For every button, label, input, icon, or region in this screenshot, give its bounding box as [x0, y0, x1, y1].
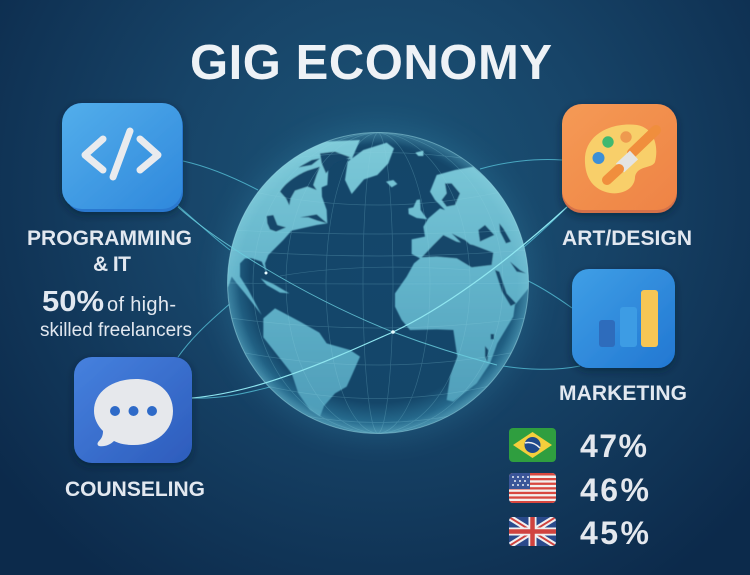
- stat: 50 percent of high-skilled freelancers: of high-: [107, 294, 176, 316]
- Persian Gulf: [510, 262, 526, 273]
- label: and IT: & IT: [93, 253, 131, 276]
- Britain and Ireland: [408, 199, 427, 219]
- panel: marketing: [559, 269, 687, 405]
- stat: 50 percent of high-skilled freelancers: [40, 286, 192, 341]
- icon: flag of the USA: [509, 473, 556, 503]
- icon: palette and brush: [562, 104, 677, 213]
- Red Sea: [495, 270, 516, 306]
- icon: flag of the UK: [509, 517, 556, 546]
- panel: counseling: [65, 357, 205, 501]
- North America: [217, 140, 360, 315]
- limb shine: [227, 132, 529, 434]
- Iceland: [386, 180, 397, 187]
- panel: programming and IT: [27, 103, 192, 341]
- label: programming: PROGRAMMING: [27, 227, 192, 250]
- label: marketing: MARKETING: [559, 382, 687, 405]
- stat: 50 percent of high-skilled freelancers: 50%: [42, 286, 104, 318]
- Black Sea: [478, 225, 494, 242]
- continents: [217, 140, 547, 417]
- stat: Brazil 47 percent: 47%: [580, 428, 647, 464]
- icon: code brackets: [62, 103, 183, 212]
- globe halo: [222, 127, 534, 439]
- globe: [217, 132, 547, 434]
- Baltic: [442, 183, 460, 207]
- label: art/design: ART/DESIGN: [562, 227, 692, 250]
- inland waters: [267, 152, 526, 362]
- graticule: [228, 133, 528, 433]
- connection lines behind globe: [176, 159, 580, 398]
- Caribbean islands: [261, 278, 289, 293]
- stat: USA 46 percent: 46%: [580, 472, 649, 508]
- stat: 50 percent of high-skilled freelancers: skilled freelancers: [40, 320, 192, 341]
- panel: country shares: [509, 428, 649, 551]
- panel: art and design: [562, 104, 692, 250]
- Arctic islands: [415, 151, 423, 156]
- orbit lines over globe: [178, 207, 567, 398]
- Old World landmass: [395, 167, 547, 402]
- stat: UK 45 percent: 45%: [580, 515, 649, 551]
- label: counseling: COUNSELING: [65, 478, 205, 501]
- Greenland: [345, 143, 394, 194]
- icon: flag of Brazil: [509, 428, 556, 462]
- St Lawrence: [300, 214, 327, 223]
- icon: bar chart: [572, 269, 675, 368]
- Hudson: [280, 167, 320, 205]
- Caspian: [499, 223, 511, 243]
- icon: chat bubble: [74, 357, 192, 463]
- Mediterranean: [422, 235, 493, 267]
- Madagascar strip: [491, 334, 494, 339]
- South America: [263, 308, 360, 417]
- Great Lakes: [267, 215, 286, 232]
- title: GIG ECONOMY: [190, 36, 552, 90]
